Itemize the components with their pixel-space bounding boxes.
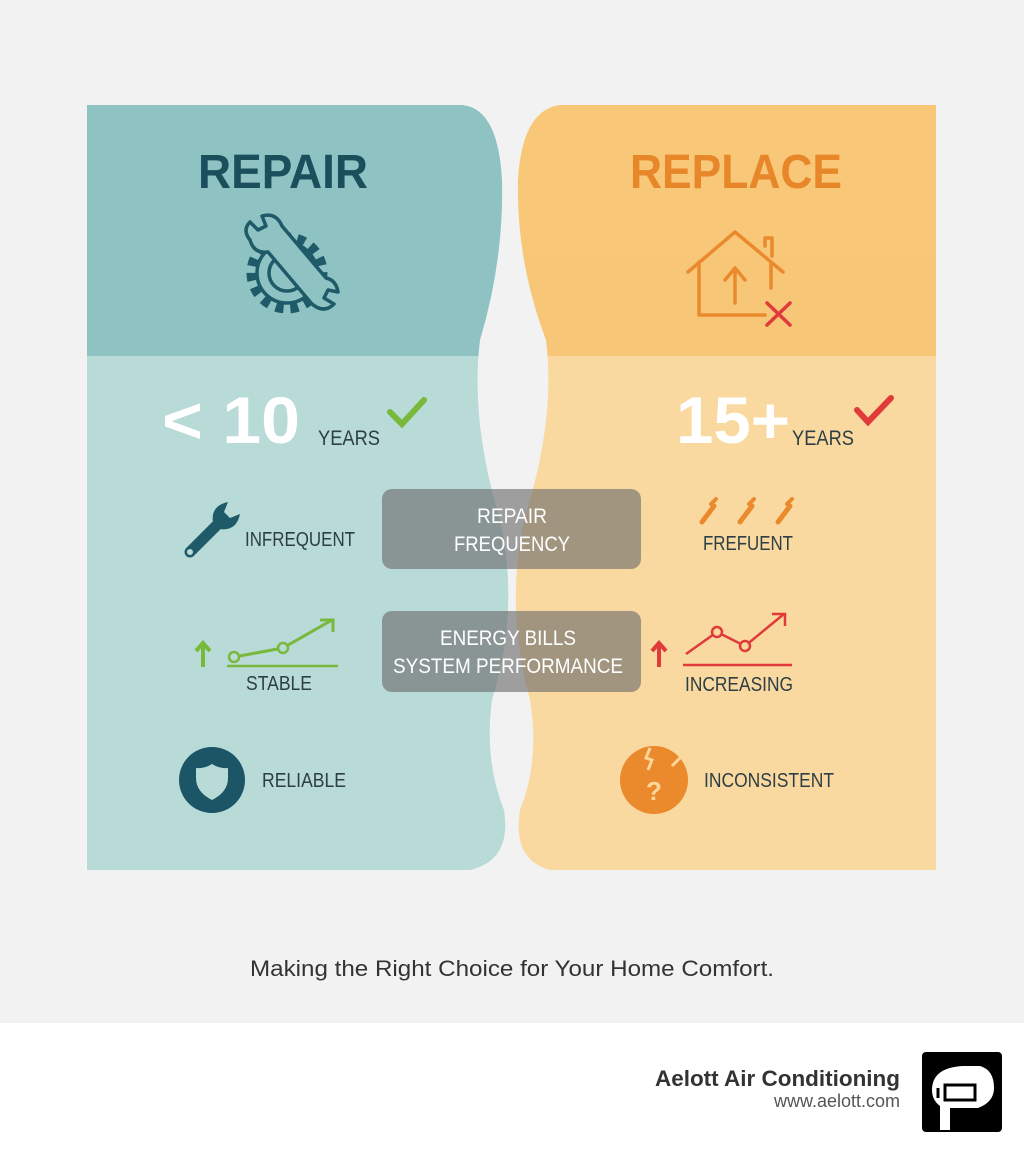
label box: energy bills: SYSTEM PERFORMANCE <box>393 655 623 678</box>
item: infrequent: INFREQUENT <box>245 529 355 551</box>
item: increasing: INCREASING <box>685 674 793 696</box>
item: inconsistent: ? <box>646 776 662 806</box>
footer: Aelott Air Conditioning <box>655 1066 900 1091</box>
icon: house with arrow and x <box>688 232 790 325</box>
caption: Making the Right Choice for Your Home Comfort. <box>250 956 774 981</box>
panel: repair <box>87 105 527 870</box>
label box: energy bills <box>382 611 641 692</box>
stat: 15+ years <box>676 383 891 457</box>
item: infrequent <box>187 502 355 555</box>
item: reliable <box>179 747 346 813</box>
item: inconsistent <box>620 746 834 814</box>
logo <box>922 1052 1002 1132</box>
item: frequent: FREFUENT <box>703 533 793 555</box>
heading: replace: REPLACE <box>630 146 842 199</box>
heading: repair: REPAIR <box>198 146 368 199</box>
stat: less than 10 years <box>162 383 424 457</box>
item: inconsistent: INCONSISTENT <box>704 770 834 792</box>
footer <box>0 1023 1024 1154</box>
stat: 15+ years: YEARS <box>792 427 854 450</box>
stat: less than 10 years: YEARS <box>318 427 380 450</box>
item: reliable: RELIABLE <box>262 770 346 792</box>
footer: www.aelott.com <box>773 1091 900 1111</box>
panel: replace <box>500 105 936 870</box>
stat: less than 10 years: < 10 <box>162 383 300 457</box>
icon: wrench and gear <box>246 215 338 309</box>
item: stable: STABLE <box>246 673 312 695</box>
item: increasing <box>652 614 793 696</box>
label box: energy bills: ENERGY BILLS <box>440 627 576 650</box>
label box: repair frequency: FREQUENCY <box>454 533 570 556</box>
label box: repair frequency: REPAIR <box>477 505 547 528</box>
label box: repair frequency <box>382 489 641 569</box>
item: frequent <box>702 499 793 555</box>
stat: 15+ years: 15+ <box>676 383 790 457</box>
item: stable <box>196 620 338 695</box>
